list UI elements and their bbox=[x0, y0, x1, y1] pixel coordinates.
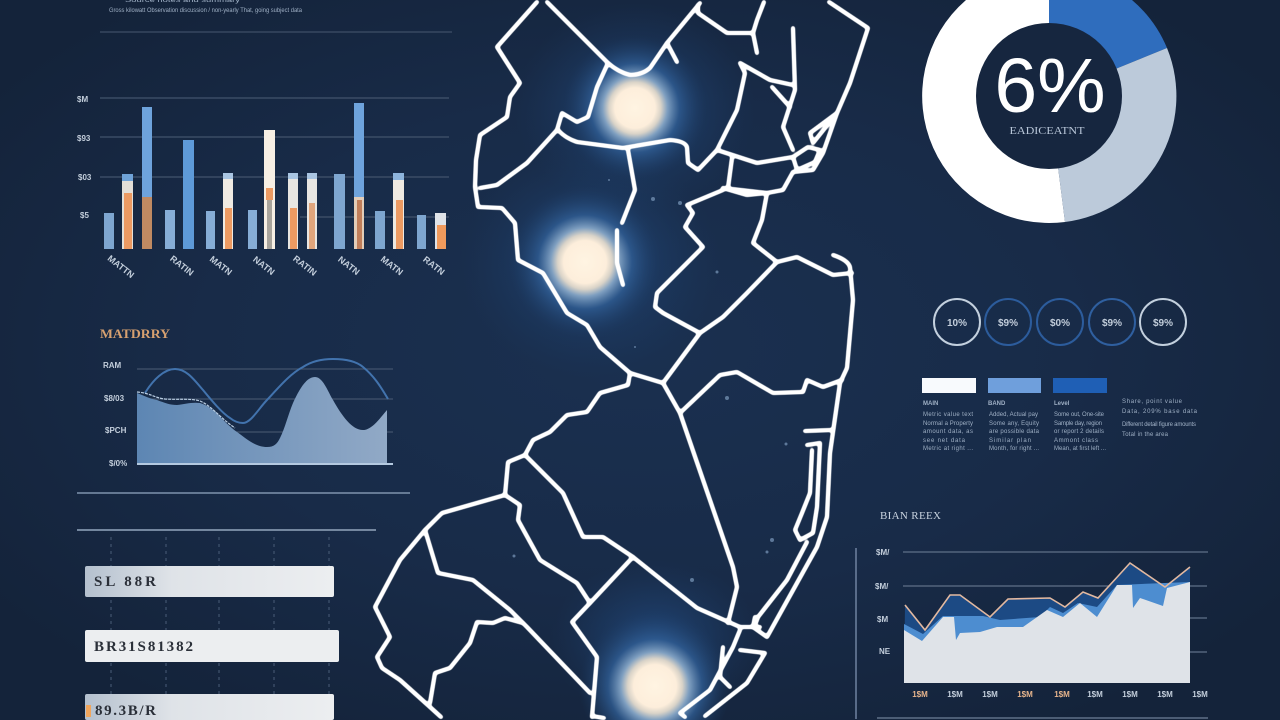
x-axis labels: 1$M bbox=[982, 690, 998, 699]
x-axis labels: MATN bbox=[379, 254, 405, 277]
donut chart bbox=[922, 0, 1176, 223]
y-axis labels: $5 bbox=[80, 211, 89, 220]
percentage circles: $0% bbox=[1050, 318, 1070, 329]
legend note: Data, 209% base data bbox=[1122, 409, 1198, 415]
x-axis labels: MATTN bbox=[106, 253, 136, 280]
x-axis labels: 1$M bbox=[1017, 690, 1033, 699]
stacked area chart panel: $M/ bbox=[876, 548, 890, 557]
central county lines bbox=[663, 188, 777, 383]
legend note: Total in the area bbox=[1122, 432, 1169, 438]
grey area layer bbox=[904, 582, 1190, 683]
percentage circles: $9% bbox=[1102, 318, 1122, 329]
south county lines bbox=[525, 455, 760, 627]
percentage circles: 10% bbox=[947, 318, 967, 329]
map: county outlines bbox=[375, 2, 868, 718]
caption: top left bbox=[109, 0, 303, 14]
x-axis labels: NATN bbox=[336, 254, 362, 277]
legend item: white: Normal a Property bbox=[923, 421, 973, 427]
legend item: dark blue: Mean, at first left ... bbox=[1054, 446, 1106, 452]
legend item: dark blue: or report 2 details bbox=[1054, 429, 1104, 435]
legend item: dark blue: Some out, One-site bbox=[1054, 412, 1105, 418]
x-axis labels: RATIN bbox=[291, 253, 319, 278]
bar chart bbox=[77, 32, 452, 280]
filled area bbox=[137, 377, 387, 464]
legend item: white: Metric value text bbox=[923, 412, 973, 418]
caption: top left: Gross kilowatt Observation discussion / non-yearly That, going subject data bbox=[109, 8, 303, 14]
y-axis labels: $03 bbox=[78, 173, 92, 182]
x-axis labels: NATN bbox=[251, 254, 277, 277]
map halos bbox=[460, 3, 760, 720]
legend item: white: Metric at right ... bbox=[923, 446, 973, 452]
legend note bbox=[1122, 399, 1198, 438]
segment: white bbox=[922, 0, 1065, 223]
bar row 3 bbox=[85, 694, 334, 720]
north county lines bbox=[547, 2, 700, 75]
percentage circles: $9% bbox=[998, 318, 1018, 329]
west outer boundary bbox=[375, 2, 630, 717]
bar row 3: 89.3B/R bbox=[95, 703, 156, 719]
dark area layer bbox=[904, 563, 1190, 683]
legend note: Share, point value bbox=[1122, 399, 1183, 405]
x-axis labels: 1$M bbox=[1157, 690, 1173, 699]
y-axis labels: $93 bbox=[77, 134, 91, 143]
area chart panel bbox=[100, 326, 393, 468]
legend item: white bbox=[922, 378, 976, 452]
legend item: light blue: Some any, Equity bbox=[989, 421, 1039, 427]
trend line bbox=[905, 563, 1190, 630]
x-axis labels: MATN bbox=[208, 254, 234, 277]
legend item: white: amount data, as bbox=[923, 429, 973, 435]
x-axis labels: 1$M bbox=[1087, 690, 1103, 699]
x-axis labels: 1$M bbox=[1192, 690, 1208, 699]
stacked area title: BIAN REEX bbox=[880, 510, 941, 522]
y-axis labels bbox=[77, 95, 92, 220]
bar row 2 bbox=[85, 630, 339, 662]
area chart panel: $PCH bbox=[105, 426, 127, 435]
y-axis labels: $M bbox=[77, 95, 88, 104]
legend item: light blue: Added, Actual pay bbox=[989, 412, 1038, 418]
bar row 1: SL 88R bbox=[94, 574, 156, 590]
x-axis labels bbox=[106, 253, 447, 280]
legend item: dark blue: Level bbox=[1054, 401, 1070, 407]
segment: grey-blue bbox=[1049, 48, 1176, 222]
x-axis labels: 1$M bbox=[1122, 690, 1138, 699]
legend item: light blue: BAND bbox=[988, 401, 1006, 407]
bars bbox=[104, 103, 446, 249]
stacked area chart panel: NE bbox=[879, 647, 891, 656]
segment: blue bbox=[1049, 0, 1167, 96]
area chart panel: RAM bbox=[103, 361, 122, 370]
donut label: EADICEATNT bbox=[1010, 125, 1085, 137]
percentage circles: $9% bbox=[1153, 318, 1173, 329]
x-axis labels: 1$M bbox=[1054, 690, 1070, 699]
legend item: dark blue: Sample day, region bbox=[1054, 421, 1102, 427]
area chart panel: $/0% bbox=[109, 459, 127, 468]
x-axis labels: 1$M bbox=[912, 690, 928, 699]
legend item: light blue: Similar plan bbox=[989, 438, 1031, 444]
legend item: white: MAIN bbox=[923, 401, 938, 407]
x-axis labels bbox=[912, 690, 1208, 699]
legend note: Different detail figure amounts bbox=[1122, 422, 1196, 428]
x-axis labels: RATN bbox=[421, 254, 447, 277]
map specks bbox=[512, 179, 788, 582]
line series bbox=[145, 359, 388, 423]
legend item: white: see net data bbox=[923, 438, 966, 444]
legend bbox=[922, 378, 1198, 452]
legend item: light blue bbox=[988, 378, 1041, 452]
area chart panel: $8/03 bbox=[104, 394, 125, 403]
stacked area chart panel bbox=[856, 510, 1208, 719]
horizontal bars panel bbox=[77, 530, 376, 720]
legend item: dark blue: Ammont class bbox=[1054, 438, 1098, 444]
legend item: light blue: Month, for right ... bbox=[989, 446, 1039, 452]
x-axis labels: RATIN bbox=[168, 253, 196, 278]
bar row 2: BR31S81382 bbox=[94, 639, 193, 655]
donut value: 6% bbox=[994, 43, 1106, 129]
legend item: dark blue bbox=[1053, 378, 1107, 452]
stacked area chart panel: $M bbox=[877, 615, 888, 624]
x-axis labels: 1$M bbox=[947, 690, 963, 699]
map glows bbox=[509, 36, 731, 720]
stacked area chart panel: $M/ bbox=[875, 582, 889, 591]
percentage circles bbox=[934, 299, 1186, 345]
bar row 1 bbox=[85, 566, 334, 597]
light blue layer bbox=[904, 582, 1190, 683]
area chart title: MATDRRY bbox=[100, 326, 171, 341]
legend item: light blue: are possible data bbox=[989, 429, 1040, 435]
